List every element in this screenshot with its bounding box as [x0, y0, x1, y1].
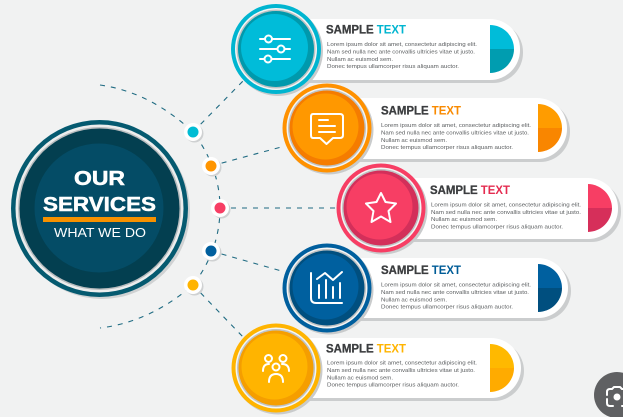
body text: Lorem ipsum dolor sit amet, consectetur adipiscing elit. [381, 123, 531, 129]
panel: service 1 (cyan) [231, 4, 523, 96]
body text: Nullam ac euismod sem. [327, 57, 393, 63]
heading: SAMPLE TEXT [430, 185, 510, 197]
heading: SAMPLE TEXT [326, 24, 406, 36]
body text: Donec tempus ullamcorper risus aliquam auctor. [327, 64, 459, 70]
body text: Nam sed nulla nec ante convallis ultricies vitae ut justo. [381, 130, 529, 136]
heading: our services [43, 168, 156, 216]
subheading: what we do: WHAT WE DO [54, 225, 146, 240]
icon badge [232, 324, 322, 414]
body text: Donec tempus ullamcorper risus aliquam auctor. [327, 382, 459, 388]
body text: Nam sed nulla nec ante convallis ultricies vitae ut justo. [327, 50, 475, 56]
body text: Nullam ac euismod sem. [381, 138, 447, 144]
body text [327, 42, 477, 70]
body text: Nullam ac euismod sem. [327, 376, 393, 382]
body text [327, 360, 477, 388]
body text: Donec tempus ullamcorper risus aliquam auctor. [381, 304, 513, 310]
panel: service 4 (blue) [282, 244, 571, 334]
body text: Nullam ac euismod sem. [381, 298, 447, 304]
icon: people [263, 355, 289, 382]
icon: growth chart [311, 272, 342, 303]
heading: our services: SERVICES [43, 194, 156, 216]
panel: service 3 (pink) [336, 164, 621, 254]
orange underline [43, 217, 156, 222]
body text: Lorem ipsum dolor sit amet, consectetur adipiscing elit. [327, 360, 477, 366]
icon: star [366, 193, 396, 222]
central badge: our services [11, 120, 190, 299]
timeline dots [184, 123, 230, 296]
panel: service 2 (orange) [282, 84, 570, 174]
body text [381, 282, 531, 310]
icon badge [282, 244, 374, 334]
half-circle tab [538, 104, 562, 152]
half-circle tab [490, 25, 514, 73]
heading: SAMPLE TEXT [326, 344, 406, 356]
panel: service 5 (yellow) [232, 324, 524, 414]
dashed connector lines [100, 80, 336, 338]
body text: Nam sed nulla nec ante convallis ultricies vitae ut justo. [431, 210, 581, 216]
body text: Nam sed nulla nec ante convallis ultricies vitae ut justo. [327, 368, 475, 374]
heading: SAMPLE TEXT [381, 265, 461, 277]
icon badge [231, 4, 323, 96]
icon: sliders [260, 36, 290, 62]
icon: speech bubble [311, 114, 343, 144]
heading: our services: OUR [74, 168, 126, 190]
half-circle tab [538, 264, 562, 312]
icon: camera button [594, 372, 623, 417]
body text [431, 202, 581, 230]
body text: Lorem ipsum dolor sit amet, consectetur adipiscing elit. [327, 42, 477, 48]
icon badge [282, 84, 374, 174]
half-circle tab [490, 344, 514, 392]
body text: Nam sed nulla nec ante convallis ultricies vitae ut justo. [381, 290, 529, 296]
body text: Lorem ipsum dolor sit amet, consectetur adipiscing elit. [381, 282, 531, 288]
body text: Donec tempus ullamcorper risus aliquam auctor. [431, 224, 563, 230]
icon badge [336, 164, 428, 254]
body text: Donec tempus ullamcorper risus aliquam auctor. [381, 145, 513, 151]
half-circle tab [588, 184, 612, 232]
heading: SAMPLE TEXT [381, 106, 461, 118]
body text [381, 123, 531, 151]
body text: Lorem ipsum dolor sit amet, consectetur adipiscing elit. [431, 202, 581, 208]
body text: Nullam ac euismod sem. [431, 217, 497, 223]
